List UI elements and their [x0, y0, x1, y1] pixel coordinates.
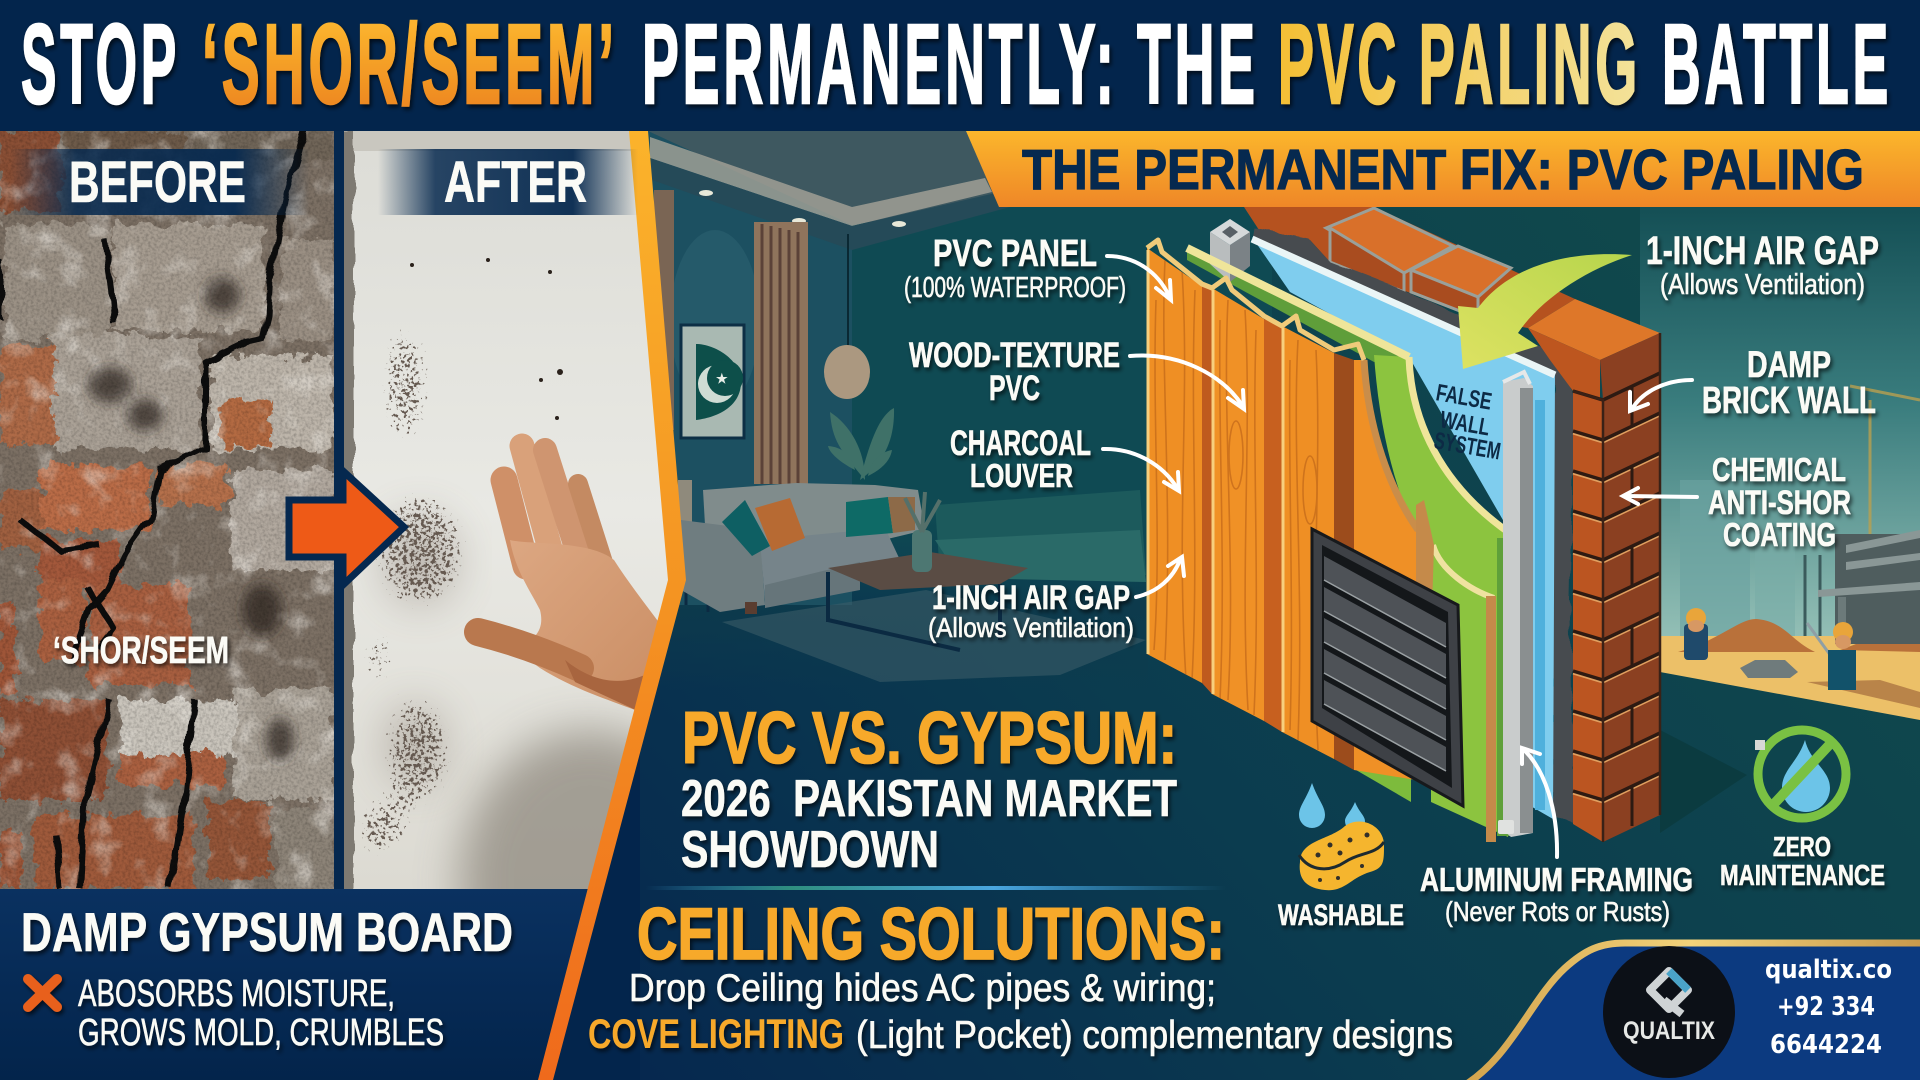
subheading: SHOWDOWN	[681, 821, 939, 879]
label: zero maintenance	[1720, 831, 1885, 892]
diagram: false wall cross-section	[1147, 207, 1660, 842]
charcoal louver vent	[1312, 529, 1463, 806]
tan side strip	[1433, 545, 1494, 598]
divider line	[646, 886, 1226, 890]
arrow: wood-texture PVC	[1130, 356, 1244, 409]
black mold speckle	[358, 330, 491, 856]
icon: X mark	[28, 979, 57, 1007]
label: chemical anti-shor coating: CHEMICAL	[1712, 451, 1846, 488]
worker left	[1684, 608, 1708, 660]
icon: no water	[1755, 730, 1846, 818]
dunes	[1678, 619, 1920, 652]
panel: bottom left caption background	[0, 889, 596, 1080]
heading: PVC vs gypsum: PVC VS. GYPSUM:	[682, 698, 1177, 779]
label: charcoal louver: CHARCOAL	[950, 424, 1091, 463]
panel: before brick wall photo	[0, 131, 334, 889]
label: wood-texture PVC: PVC	[989, 369, 1040, 408]
aluminum square tube	[1210, 219, 1250, 282]
panel: construction site backdrop	[1640, 207, 1920, 833]
label: aluminum framing	[1420, 861, 1693, 927]
icon: hand on wall	[478, 446, 672, 712]
label: shor/seem: ‘SHOR/SEEM	[53, 630, 229, 672]
ceiling description: Drop Ceiling hides AC pipes & wiring;	[629, 967, 1216, 1010]
caption list	[78, 973, 444, 1054]
arrow: big yellow-green curve	[1458, 254, 1632, 369]
side lamp and table	[678, 480, 710, 612]
caption: damp gypsum board	[21, 901, 513, 1054]
label: damp brick wall	[1702, 344, 1876, 422]
main scene background	[640, 131, 1920, 1080]
contact details: qualtix.co	[1765, 955, 1892, 985]
label: PVC panel	[904, 233, 1126, 304]
arrow: aluminum framing	[1522, 748, 1557, 857]
heading: ceiling solutions	[588, 894, 1453, 1057]
arrow: charcoal louver	[1103, 449, 1179, 491]
cream top edge	[1187, 248, 1409, 357]
title text: PERMANENTLY: THE	[642, 1, 1259, 127]
contact details: 6644224	[1770, 1030, 1882, 1060]
icon: sponge and water drops	[1299, 783, 1384, 890]
arrow: anti-shor coating	[1623, 488, 1697, 504]
label: wood-texture PVC	[909, 336, 1120, 408]
soft mold staining	[384, 516, 456, 785]
room left wall	[648, 131, 852, 605]
potted plant	[828, 408, 894, 480]
caption list: GROWS MOLD, CRUMBLES	[78, 1012, 444, 1054]
top row bricks	[1326, 208, 1511, 318]
logo circle	[1603, 946, 1735, 1078]
label: air gap right	[1646, 229, 1879, 301]
label: PVC panel: PVC PANEL	[933, 233, 1097, 275]
dark mastic layer	[1252, 228, 1576, 824]
ceiling description: (Light Pocket) complementary designs	[856, 1014, 1453, 1057]
wall art: Pakistan flag	[681, 325, 744, 438]
label: aluminum framing: ALUMINUM FRAMING	[1420, 861, 1693, 898]
coffee table and vase	[828, 492, 1028, 650]
rough plaster edge	[344, 131, 356, 889]
label: damp brick wall: DAMP	[1747, 344, 1831, 385]
wall art: Pakistan flag: ★	[716, 371, 728, 386]
label: chemical anti-shor coating	[1708, 451, 1851, 553]
arrow: air gap left	[1136, 557, 1184, 597]
callout labels	[904, 229, 1885, 932]
false wall system label	[1432, 379, 1503, 466]
label: air gap left	[928, 579, 1134, 643]
label: zero maintenance: ZERO	[1773, 831, 1831, 862]
pale mottling	[0, 131, 334, 889]
arrow: damp brick wall	[1630, 380, 1692, 411]
false wall system label: SYSTEM	[1432, 427, 1503, 466]
label: washable: WASHABLE	[1278, 899, 1404, 932]
label: charcoal louver	[950, 424, 1091, 494]
label: AFTER: AFTER	[444, 150, 587, 215]
heading: ceiling solutions: CEILING SOLUTIONS:	[637, 894, 1225, 975]
sofas	[681, 483, 1146, 614]
mold stains	[88, 277, 294, 762]
title text: ‘SHOR/SEEM’	[202, 1, 618, 127]
callout arrows	[1103, 256, 1697, 857]
false wall system label: WALL	[1438, 406, 1492, 442]
title bar	[0, 0, 1920, 131]
label: air gap right: (Allows Ventilation)	[1660, 269, 1865, 301]
sand ground	[1660, 636, 1920, 720]
ceiling description: COVE LIGHTING	[588, 1010, 844, 1057]
title text	[21, 1, 1892, 127]
label: chemical anti-shor coating: ANTI-SHOR	[1708, 484, 1851, 522]
subheading: 2026 PAKISTAN MARKET	[681, 770, 1177, 828]
label: aluminum framing: (Never Rots or Rusts)	[1445, 896, 1670, 927]
panel: after damp wall	[344, 131, 668, 889]
label: wood-texture PVC: WOOD-TEXTURE	[909, 336, 1120, 375]
arrow: before to after	[289, 471, 404, 585]
contact details	[1765, 955, 1892, 1060]
wood slat feature walls	[654, 190, 808, 484]
footer: logo and contact	[1460, 943, 1920, 1080]
brick wall corner	[1528, 299, 1660, 842]
heading: PVC vs gypsum	[681, 698, 1177, 879]
rug	[722, 590, 1146, 682]
label: air gap left: (Allows Ventilation)	[928, 612, 1134, 643]
blue insulation layer	[1252, 237, 1555, 819]
logo circle: QUALTIX	[1623, 1017, 1715, 1045]
brick wall back mass	[1244, 207, 1575, 328]
divider: before and after	[334, 131, 344, 889]
aluminum channel	[1498, 372, 1533, 837]
label: charcoal louver: LOUVER	[970, 457, 1073, 494]
wood grain	[1154, 260, 1318, 750]
false wall system label: FALSE	[1434, 379, 1494, 416]
green backing layer	[1187, 248, 1511, 837]
diagonal gold stripe	[538, 131, 686, 1080]
wood PVC panels	[1147, 240, 1418, 780]
label: air gap left: 1-INCH AIR GAP	[932, 579, 1130, 617]
panel: living room illustration	[648, 131, 1272, 690]
ceiling description	[588, 967, 1453, 1057]
label: chemical anti-shor coating: COATING	[1723, 516, 1836, 553]
building under construction	[1818, 530, 1920, 647]
worker right	[1807, 622, 1856, 690]
distant buildings and crane	[1680, 386, 1920, 640]
subheading	[681, 770, 1177, 879]
cracks	[0, 131, 305, 889]
arrow: PVC panel	[1107, 256, 1171, 300]
caption: damp gypsum board: DAMP GYPSUM BOARD	[21, 901, 513, 963]
icon: Q mark	[1650, 971, 1688, 1014]
label: BEFORE: BEFORE	[69, 150, 246, 215]
label: PVC panel: (100% WATERPROOF)	[904, 272, 1126, 304]
bricks	[0, 131, 334, 889]
pendant lamp	[824, 234, 870, 399]
caption list: ABOSORBS MOISTURE,	[78, 973, 395, 1015]
title text: STOP	[21, 1, 180, 127]
room floor	[648, 600, 1148, 690]
room back wall	[852, 131, 1272, 611]
contact details: +92 334	[1777, 992, 1875, 1022]
